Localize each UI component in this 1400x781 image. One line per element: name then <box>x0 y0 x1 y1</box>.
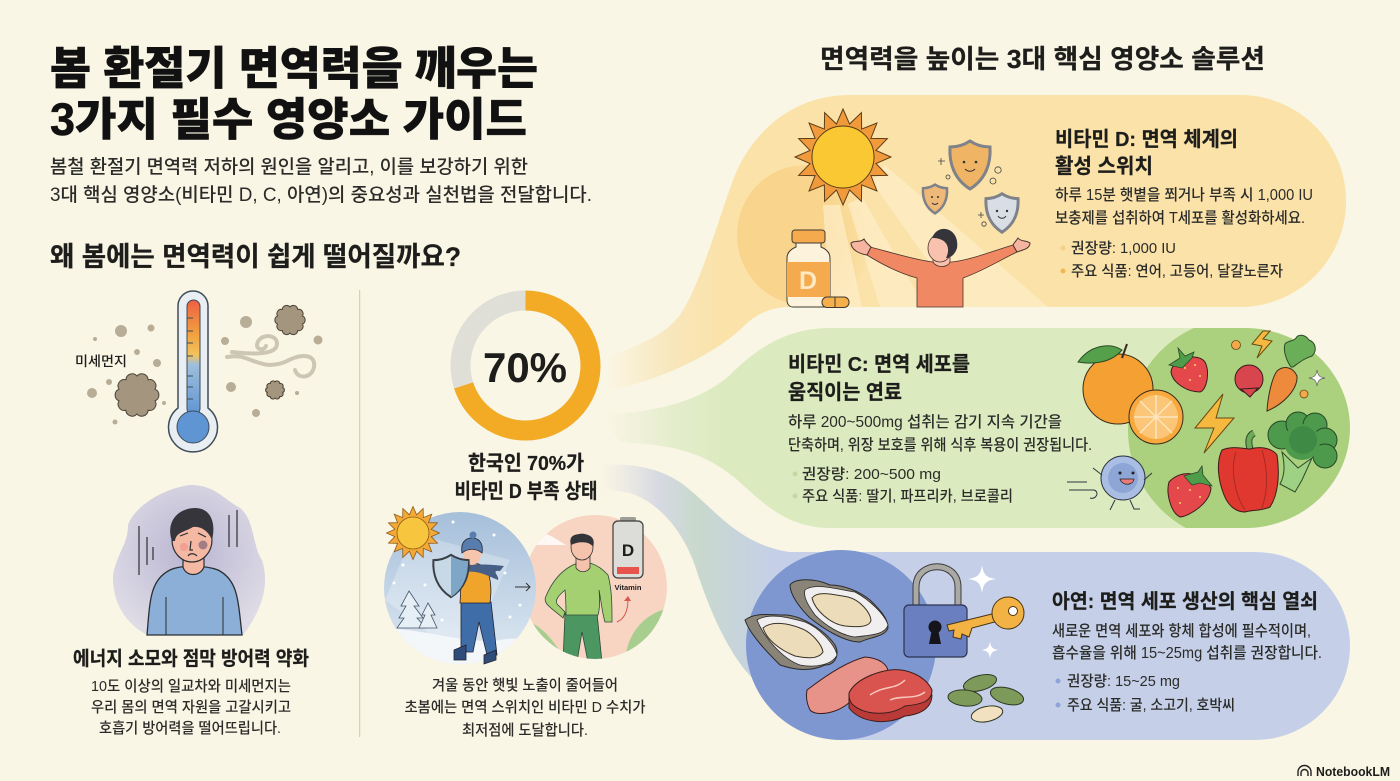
dust particles <box>87 305 322 424</box>
battery <box>620 517 636 522</box>
snow dots <box>392 520 522 622</box>
sparkles <box>968 565 998 658</box>
bullet list <box>1060 240 1283 280</box>
icon: vitamin D bottle <box>787 230 849 308</box>
icon: orange <box>1078 344 1183 444</box>
title: 3가지 필수 영양소 가이드 <box>50 94 527 145</box>
illustration: winter person with shield <box>380 506 540 670</box>
panel: vitamin D: 보충제를 섭취하여 T세포를 활성화하세요. <box>1055 209 1305 227</box>
body <box>147 566 242 635</box>
intro text: 3대 핵심 영양소(비타민 D, C, 아연)의 중요성과 실천법을 전달합니다. <box>50 184 592 206</box>
heading: 아연: 면역 세포 생산의 핵심 열쇠 <box>1052 590 1318 613</box>
icon: oysters <box>745 580 888 670</box>
bullet list: 주요 식품: 굴, 소고기, 호박씨 <box>1067 697 1235 714</box>
seafood circle <box>746 550 936 740</box>
donut caption: 비타민 D 부족 상태 <box>454 480 598 503</box>
heading: 비타민 C: 면역 세포를 <box>788 353 970 376</box>
donut chart 70% <box>460 300 590 430</box>
icon: pumpkin seeds <box>947 671 1025 725</box>
panel: vitamin C: 움직이는 연료 <box>788 381 902 404</box>
band: zinc background <box>600 464 1350 740</box>
icon: strawberries <box>1168 348 1212 517</box>
bullet list: 권장량: 1,000 IU <box>1071 240 1176 257</box>
icon: man with raised arms <box>851 229 1030 307</box>
sweat lines <box>139 510 237 575</box>
winter caption: 겨울 동안 햇빛 노출이 줄어들어 <box>432 677 618 694</box>
left column: caption: 10도 이상의 일교차와 미세먼지는 <box>91 678 291 695</box>
body text: 새로운 면역 세포와 항체 합성에 필수적이며, <box>1052 622 1311 640</box>
left column: dust and thermometer <box>75 291 322 452</box>
heading: why spring: 왜 봄에는 면역력이 쉽게 떨어질까요? <box>50 242 461 272</box>
panel: vitamin D: 활성 스위치 <box>1055 155 1153 178</box>
thermometer <box>168 291 218 452</box>
panel: vitamin D <box>737 109 1313 308</box>
title <box>50 43 538 145</box>
intro text <box>50 156 592 206</box>
pine trees <box>397 591 437 628</box>
icon: broccoli <box>1268 412 1337 492</box>
green man <box>563 613 602 662</box>
winter person <box>461 602 497 655</box>
icon: shields with faces <box>923 141 1018 232</box>
bullet list: 주요 식품: 딸기, 파프리카, 브로콜리 <box>802 488 1013 505</box>
watermark: NotebookLM: NotebookLM <box>1316 764 1390 779</box>
icon: carrot <box>1267 335 1315 411</box>
intro text: 봄철 환절기 면역력 저하의 원인을 알리고, 이를 보강하기 위한 <box>50 156 528 178</box>
heading: 비타민 D: 면역 체계의 <box>1055 128 1238 151</box>
panel: zinc <box>745 550 1322 740</box>
icon: padlock and key <box>904 567 1024 657</box>
hair <box>170 508 213 541</box>
icon: running immune cell <box>1067 456 1152 510</box>
left column: caption <box>73 648 309 737</box>
heading: solutions: 면역력을 높이는 3대 핵심 영양소 솔루션 <box>820 44 1265 74</box>
winter caption <box>404 677 646 739</box>
shield <box>433 555 469 597</box>
body text: 하루 15분 햇볕을 쬐거나 부족 시 1,000 IU <box>1055 186 1313 204</box>
sun <box>386 506 440 560</box>
donut caption <box>454 452 598 503</box>
label: fine dust: 미세먼지 <box>75 354 127 369</box>
icon: red pepper <box>1218 433 1278 512</box>
panel: zinc: 흡수율을 위해 15~25mg 섭취를 권장합니다. <box>1052 644 1322 662</box>
panel: vitamin C: 단축하며, 위장 보호를 위해 식후 복용이 권장됩니다. <box>788 436 1092 454</box>
neck and head <box>183 555 204 574</box>
icon: sun <box>795 109 891 205</box>
title: 봄 환절기 면역력을 깨우는 <box>50 43 538 94</box>
bullet list: 권장량: 15~25 mg <box>1067 673 1180 690</box>
icon: meat <box>806 657 932 722</box>
left column: tired person <box>113 485 265 635</box>
left column: caption: 우리 몸의 면역 자원을 고갈시키고 <box>91 699 291 716</box>
band: vitamin D background <box>605 95 1346 392</box>
band: vitamin C background <box>600 328 1350 528</box>
wind swirls <box>227 336 314 376</box>
arrow <box>515 583 530 591</box>
donut caption: 한국인 70%가 <box>468 452 584 475</box>
winter caption: 초봄에는 면역 스위치인 비타민 D 수치가 <box>404 699 646 716</box>
bullet list: 권장량: 200~500 mg <box>802 466 941 483</box>
bullet list <box>1056 673 1235 714</box>
icon: lightning bolts <box>1195 331 1272 453</box>
panel shading and sun rays <box>737 165 1048 307</box>
illustration: spring person with low vitamin D <box>530 515 667 659</box>
illustration: spring person with low vitamin D: Vitamin <box>615 583 642 592</box>
donut chart 70%: 70% <box>483 344 567 391</box>
winter caption: 최저점에 도달합니다. <box>462 722 588 739</box>
panel: vitamin C <box>788 328 1350 528</box>
illustration: spring person with low vitamin D: D <box>622 541 634 560</box>
haze blob <box>113 485 265 635</box>
bullet list <box>792 466 1013 505</box>
left column: caption: 에너지 소모와 점막 방어력 약화 <box>73 648 309 670</box>
face <box>180 533 206 556</box>
icon: vitamin D bottle: D <box>799 267 817 295</box>
produce circle <box>1128 328 1350 528</box>
sparkles and dots <box>1232 340 1325 398</box>
body text: 하루 200~500mg 섭취는 감기 지속 기간을 <box>788 413 1062 431</box>
bullet list: 주요 식품: 연어, 고등어, 달걀노른자 <box>1071 263 1283 280</box>
icon: small apple <box>1235 365 1263 397</box>
left column: caption: 호흡기 방어력을 떨어뜨립니다. <box>99 720 281 737</box>
